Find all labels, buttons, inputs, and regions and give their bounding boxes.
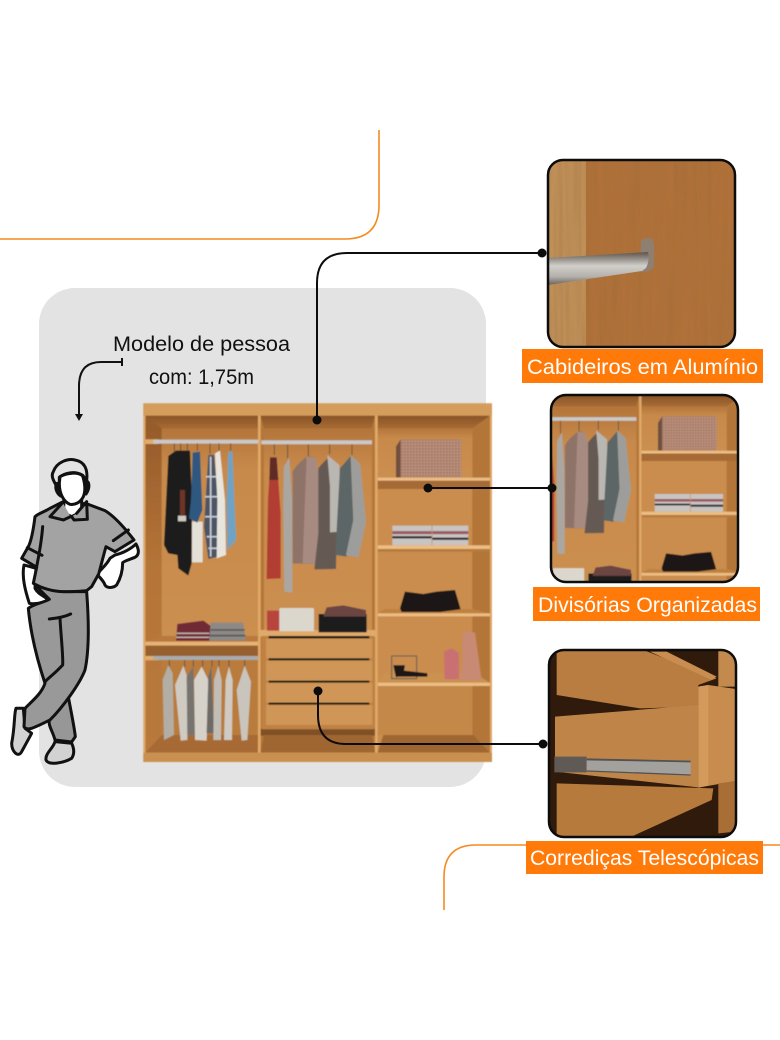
left arm: [23, 565, 50, 604]
caption: Corrediças Telescópicas: Corrediças Telescópicas: [530, 847, 759, 870]
sleeve cuffs: [27, 527, 128, 567]
arrow: label to person: [75, 358, 122, 421]
connector: slides callout: [314, 686, 548, 748]
detail panel: organized dividers: [550, 394, 740, 584]
wardrobe: [143, 403, 492, 762]
rail bracket: [640, 238, 654, 272]
lower drawer: [557, 783, 713, 837]
hair: [52, 460, 87, 491]
collar: [50, 502, 87, 520]
clothes on upper left rod: [164, 451, 236, 576]
shoes in wire box: [392, 656, 427, 679]
sweater: [22, 502, 134, 592]
open drawer side: [555, 705, 698, 787]
person height label: com: 1,75m: [149, 366, 254, 389]
open drawer front: [698, 685, 736, 788]
person silhouette: [12, 460, 138, 763]
rail bar: [548, 252, 649, 285]
front leg and hips: [24, 585, 88, 729]
face: [59, 473, 85, 504]
folded clothes on right shelf: [392, 526, 468, 545]
caption: Cabideiros em Alumínio: Cabideiros em Alumínio: [527, 356, 758, 379]
decorative orange corner line, bottom right: [444, 845, 780, 910]
clothes on middle rod: [267, 455, 366, 592]
middle compartment: [260, 416, 375, 753]
folded clothes on left shelf: [176, 621, 245, 641]
clothes on lower rod: [163, 665, 251, 741]
connector: rail callout: [312, 248, 546, 424]
drawers: [262, 636, 374, 729]
back leg: [45, 687, 75, 742]
ears: [56, 481, 89, 496]
caption: Cabideiros em Alumínio: [522, 349, 763, 383]
right forearm and hand: [97, 544, 138, 587]
detail panel: telescopic slides: [549, 650, 736, 837]
connector: dividers callout: [424, 484, 556, 492]
telescopic rail: [554, 757, 587, 772]
left shoe: [12, 708, 32, 754]
caption: Divisórias Organizadas: [533, 587, 760, 621]
right compartment: [378, 416, 490, 753]
trouser details: [45, 614, 71, 682]
hanger hooks: [169, 443, 352, 667]
upper drawer: [557, 650, 717, 708]
left compartment: [145, 416, 258, 753]
wardrobe boards: [143, 403, 492, 762]
neck: [63, 500, 82, 517]
person height label: [113, 333, 290, 389]
right shoe: [46, 742, 74, 763]
detail panel: aluminium hanger rail: [548, 160, 735, 347]
black bag: [400, 590, 461, 612]
woven basket: [396, 439, 461, 477]
caption: Divisórias Organizadas: Divisórias Organizadas: [538, 594, 757, 617]
person height label: Modelo de pessoa: [113, 333, 290, 356]
caption: Corrediças Telescópicas: [526, 841, 763, 874]
wardrobe carcass: [143, 403, 492, 762]
pink bags: [444, 632, 482, 681]
gray backdrop panel: [39, 288, 486, 787]
hanging rods: [153, 440, 372, 660]
handbags on middle shelf: [267, 605, 367, 632]
decorative orange corner line, top left: [0, 130, 379, 239]
